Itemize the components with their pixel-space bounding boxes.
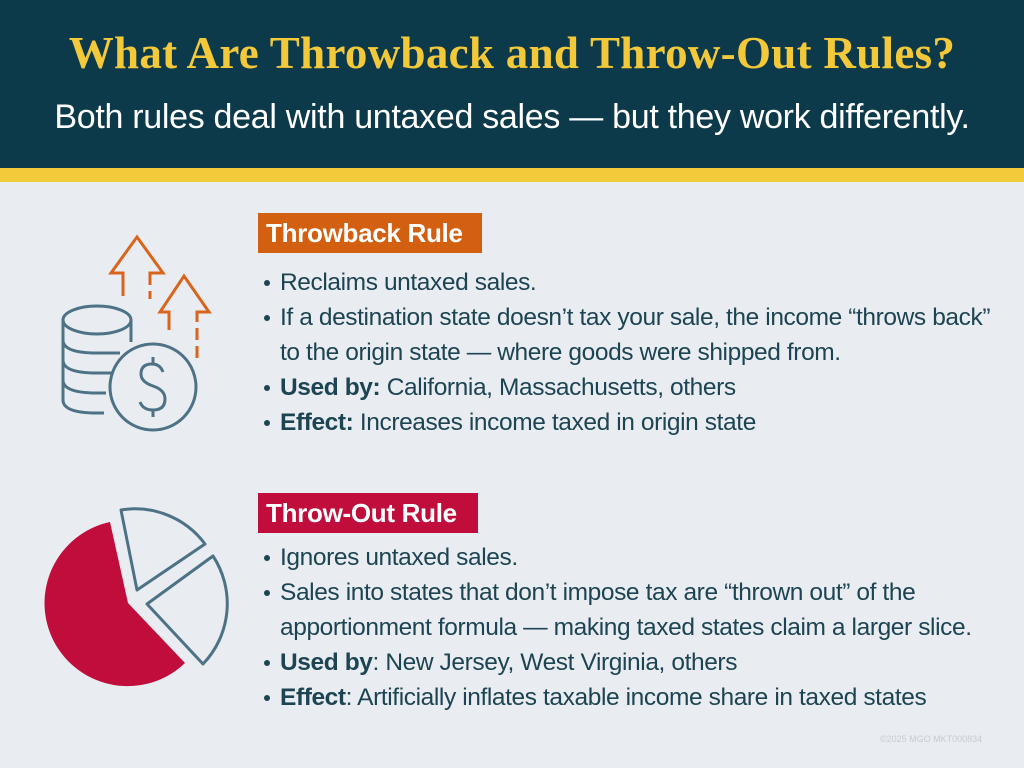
label: Throwback Rule: Throwback Rule — [266, 218, 463, 248]
icon: pie chart — [44, 507, 229, 686]
subtitle: Both rules deal with untaxed sales — but they work differently. — [54, 98, 970, 136]
bullets: throwback: to the origin state — where goods were shipped from. — [280, 339, 841, 366]
title: What Are Throwback and Throw-Out Rules? — [69, 28, 955, 78]
bullets: throw-out: apportionment formula — making taxed states claim a larger slice. — [280, 614, 972, 641]
bullets: throwback: Used by: California, Massachusetts, others — [280, 374, 736, 401]
footer credit: ©2025 MGO MKT000834 — [880, 734, 982, 744]
bullets: throw-out: Effect: Artificially inflates taxable income share in taxed states — [280, 684, 926, 711]
bullets: throwback: Effect: Increases income taxed in origin state — [280, 409, 756, 436]
label: Throwback Rule — [258, 213, 482, 253]
bullets: throwback: Reclaims untaxed sales. — [280, 269, 536, 296]
bullets: throw-out: Sales into states that don’t impose tax are “thrown out” of the — [280, 579, 915, 606]
label: Throw-Out Rule — [258, 493, 478, 533]
bullets: throwback — [264, 269, 990, 436]
label: Throw-Out Rule: Throw-Out Rule — [266, 498, 457, 528]
icon: coins with up arrows — [62, 234, 212, 432]
bullets: throw-out — [264, 544, 972, 711]
bullets: throw-out: Used by: New Jersey, West Virginia, others — [280, 649, 737, 676]
bullets: throw-out: Ignores untaxed sales. — [280, 544, 518, 571]
header banner — [0, 0, 1024, 168]
bullets: throwback: If a destination state doesn’t tax your sale, the income “throws back” — [280, 304, 990, 331]
